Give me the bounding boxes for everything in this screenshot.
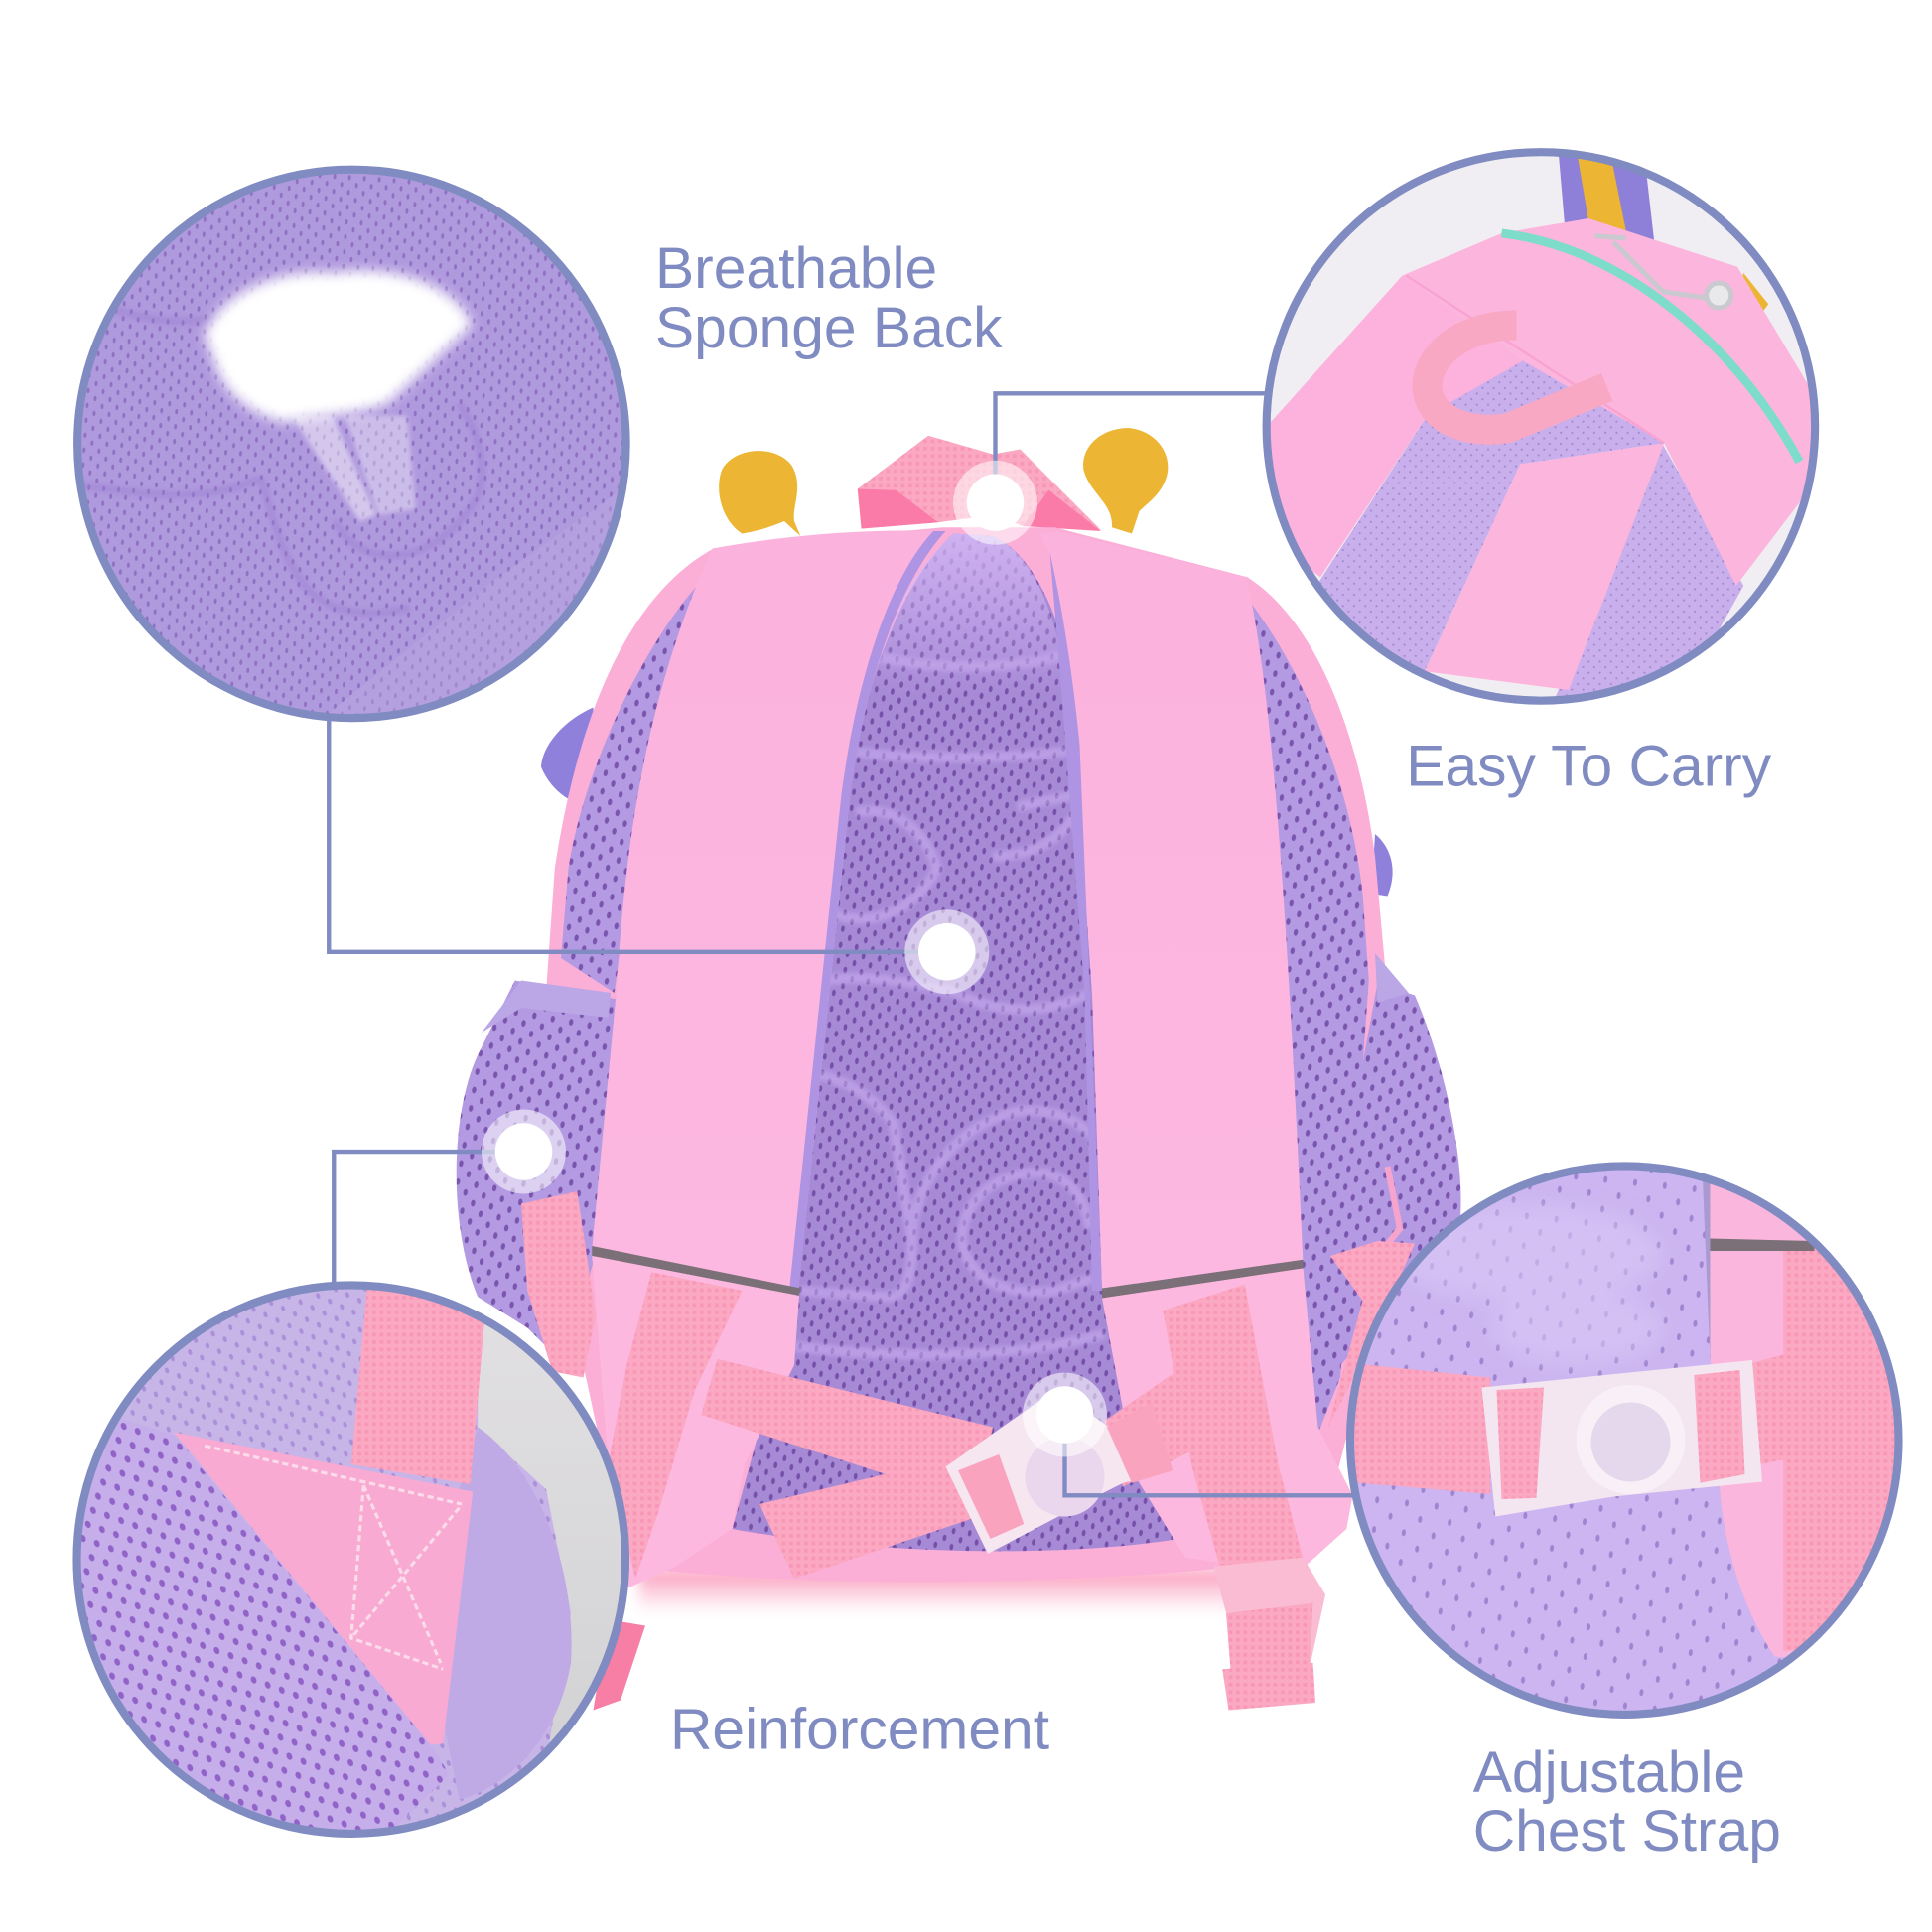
hanging strap end left [594, 1619, 645, 1710]
icon: left yellow ear [719, 451, 800, 536]
hanging strap end right [1213, 1558, 1325, 1710]
label: adjustable chest strap: Adjustable [1473, 1740, 1745, 1805]
label: breathable sponge back: Breathable [655, 236, 937, 301]
backpack pink body [546, 527, 1388, 1582]
vertical webbing [351, 1285, 487, 1484]
left side mesh [561, 577, 705, 993]
right lower strap pad [1102, 1269, 1352, 1574]
front mesh flap [81, 1422, 446, 1830]
marker dot: chest buckle [1023, 1372, 1107, 1457]
lilac pack side [445, 1428, 572, 1799]
seam highlight [1406, 276, 1664, 443]
lighter lower corner band [334, 496, 612, 714]
small pink side strap right [1328, 1241, 1415, 1428]
callout line: chest strap [1064, 1415, 1352, 1495]
top carry handle [858, 436, 1101, 531]
panel: easy to carry detail [1260, 143, 1831, 707]
translucent buckle [945, 1390, 1173, 1554]
reflective strip [1710, 1239, 1815, 1251]
center back panel mesh [733, 534, 1179, 1551]
pocket zip line right [1380, 1167, 1400, 1253]
panel: reinforcement detail [69, 1279, 633, 1849]
marker dot: back panel [904, 909, 989, 994]
floor shadow [639, 1569, 1241, 1613]
left vertical webbing [608, 1272, 743, 1579]
right vertical webbing [1163, 1285, 1306, 1577]
callout line: sponge back [329, 717, 947, 952]
gray backdrop [478, 1324, 621, 1743]
left pocket trim [482, 980, 611, 1033]
backpack product photo [457, 428, 1461, 1711]
lilac back panel right [1551, 441, 1743, 707]
right webbing [1104, 1371, 1193, 1487]
icon: left purple fin [541, 707, 594, 806]
right mesh side pocket [1340, 983, 1461, 1365]
icon: right purple fin [1371, 834, 1393, 896]
label: adjustable chest strap: Chest Strap [1473, 1799, 1781, 1863]
vertical webbing [1783, 1248, 1894, 1650]
right pocket trim [1375, 953, 1409, 1003]
left shoulder strap [592, 530, 945, 1588]
pink reinforcement triangle [174, 1432, 473, 1745]
reflective strip left [592, 1246, 800, 1296]
panel: breathable sponge back detail [74, 168, 645, 745]
callout line: easy to carry [995, 393, 1269, 502]
label: reinforcement: Reinforcement [670, 1697, 1049, 1761]
yellow ear tip [1742, 273, 1769, 311]
label: easy to carry: Easy To Carry [1406, 734, 1772, 798]
left chest webbing [1346, 1362, 1490, 1494]
right chest webbing [1752, 1354, 1783, 1464]
left lower strap pad [592, 1256, 799, 1588]
main top band [1402, 218, 1831, 586]
small pink side strap left [521, 1191, 596, 1378]
right shoulder strap [1040, 531, 1352, 1577]
label: breathable sponge back: Sponge Back [655, 296, 1003, 360]
marker dot: handle [953, 461, 1037, 545]
quilting seams [74, 298, 482, 613]
translucent buckle [1481, 1360, 1762, 1517]
lower left webbing [759, 1454, 993, 1579]
strap mesh edge [1703, 1181, 1711, 1359]
right side mesh [1247, 598, 1369, 1440]
zipper [1501, 233, 1799, 462]
icon: zipper pull charm [1594, 236, 1731, 308]
left strap [1260, 276, 1529, 577]
reflective strip right [1102, 1260, 1303, 1299]
carry loop [1428, 326, 1607, 430]
chest strap [701, 1359, 1193, 1579]
soft highlight bands [1390, 1203, 1663, 1365]
top handle purple and yellow [1559, 155, 1654, 242]
icon: right yellow ear [1083, 428, 1168, 534]
quilted padding rows [794, 655, 1104, 1354]
air flow cloud [205, 271, 472, 521]
pink strap pad [1710, 1183, 1807, 1658]
marker dot: side reinforcement [482, 1110, 566, 1193]
lilac back panel left [1318, 353, 1664, 671]
panel: adjustable chest strap detail [1346, 1161, 1911, 1719]
descending strap [1425, 443, 1664, 690]
upper left webbing [701, 1359, 993, 1483]
callout line: reinforcement [334, 1152, 524, 1286]
left mesh side pocket [457, 980, 616, 1365]
